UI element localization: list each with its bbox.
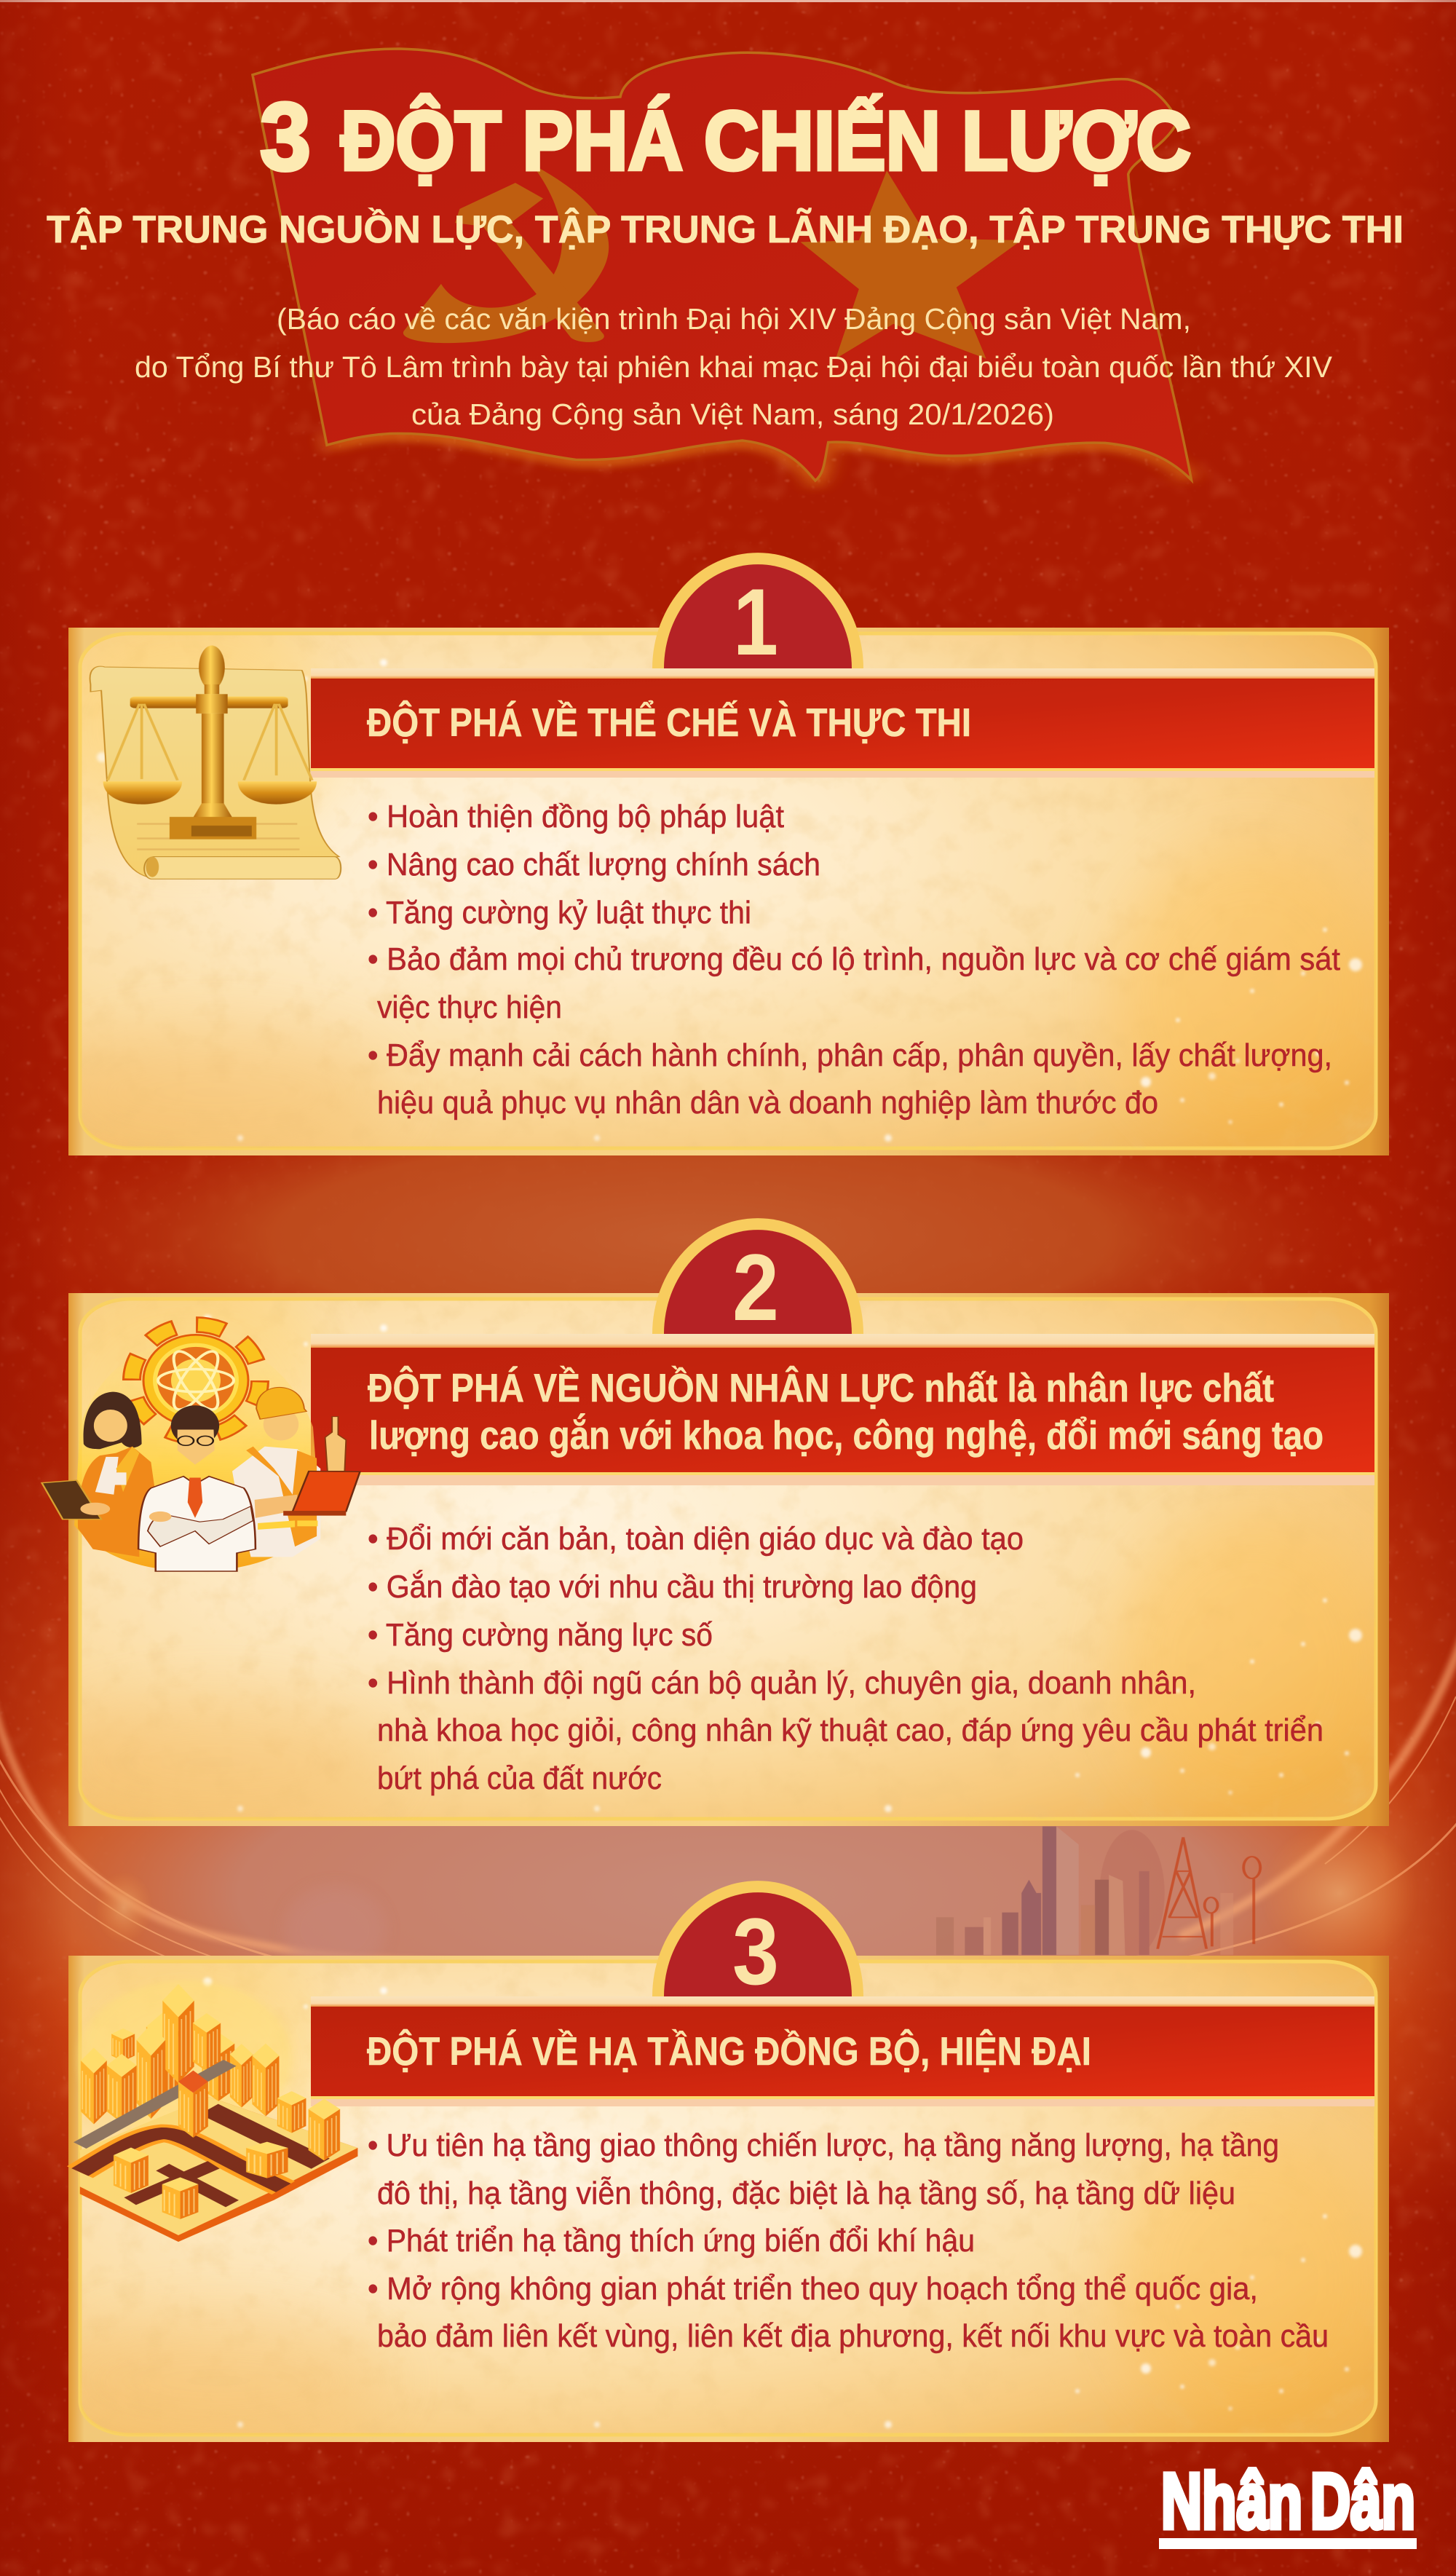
bullet list: • Tăng cường kỷ luật thực thi	[368, 895, 751, 931]
skyline silhouette	[936, 1826, 1260, 1956]
bullet list: • Bảo đảm mọi chủ trương đều có lộ trình, nguồn lực và cơ chế giám sát	[368, 941, 1340, 977]
intro text: do Tổng Bí thư Tô Lâm trình bày tại phiên khai mạc Đại hội đại biểu toàn quốc lần thứ XIV	[135, 350, 1333, 384]
buildings	[111, 2028, 135, 2061]
bullet list: bứt phá của đất nước	[377, 1761, 662, 1796]
bullet list: • Mở rộng không gian phát triển theo quy hoạch tổng thể quốc gia,	[368, 2271, 1258, 2307]
panel 1	[44, 553, 1390, 1158]
bullet list: • Đổi mới căn bản, toàn diện giáo dục và đào tạo	[368, 1521, 1024, 1557]
panel 2	[41, 1218, 1390, 1828]
title: ĐỘT PHÁ CHIẾN LƯỢC	[341, 95, 1191, 188]
header band	[311, 1334, 1374, 1485]
icon: hammer and sickle	[403, 164, 609, 343]
bullet list: hiệu quả phục vụ nhân dân và doanh nghiệp làm thước đo	[377, 1085, 1158, 1121]
logo: Dân	[1310, 2457, 1415, 2545]
city base	[80, 2097, 357, 2242]
light swooshes	[0, 1616, 1456, 1973]
bullet list	[368, 1521, 1324, 1796]
title: 3	[260, 83, 311, 190]
bullet list: đô thị, hạ tầng viễn thông, đặc biệt là hạ tầng số, hạ tầng dữ liệu	[377, 2176, 1235, 2211]
bullet list: • Hoàn thiện đồng bộ pháp luật	[368, 799, 784, 834]
bullet list: • Phát triển hạ tầng thích ứng biến đổi khí hậu	[368, 2223, 975, 2259]
bullet list: • Đẩy mạnh cải cách hành chính, phân cấp, phân quyền, lấy chất lượng,	[368, 1038, 1332, 1073]
bullet list	[368, 2127, 1329, 2354]
intro text: của Đảng Cộng sản Việt Nam, sáng 20/1/2026)	[411, 398, 1054, 431]
flag shape	[253, 49, 1191, 481]
scientist	[138, 1477, 256, 1571]
glow disc	[74, 1340, 320, 1571]
panel 3	[44, 1881, 1390, 2446]
number badge 1: 1	[733, 569, 778, 675]
bullet list: nhà khoa học giỏi, công nhân kỹ thuật cao, đáp ứng yêu cầu phát triển	[377, 1712, 1324, 1748]
number badge 2: 2	[732, 1234, 779, 1340]
bullet list: • Nâng cao chất lượng chính sách	[368, 847, 820, 882]
icon: scales on scroll	[90, 646, 341, 879]
header band	[311, 1996, 1374, 2106]
intro text: (Báo cáo về các văn kiện trình Đại hội XIV Đảng Cộng sản Việt Nam,	[277, 302, 1191, 336]
bullet list: bảo đảm liên kết vùng, liên kết địa phương, kết nối khu vực và toàn cầu	[377, 2318, 1329, 2354]
bullet list	[368, 799, 1340, 1121]
header band: lượng cao gắn với khoa học, công nghệ, đổi mới sáng tạo	[369, 1413, 1324, 1458]
bullet list: • Hình thành đội ngũ cán bộ quản lý, chuyên gia, doanh nhân,	[368, 1665, 1196, 1701]
woman	[84, 1392, 142, 1449]
icon: isometric city	[79, 1980, 357, 2242]
icon: gear	[132, 1324, 260, 1437]
icon: three professionals with gear	[41, 1324, 360, 1571]
roads	[80, 2109, 320, 2204]
bullet list: • Gắn đào tạo với nhu cầu thị trường lao động	[368, 1569, 977, 1605]
logo: Nhân	[1161, 2457, 1302, 2545]
intro text	[135, 302, 1333, 431]
number badge 2	[652, 1218, 863, 1340]
engineer	[232, 1447, 320, 1557]
header band: ĐỘT PHÁ VỀ HẠ TẦNG ĐỒNG BỘ, HIỆN ĐẠI	[367, 2028, 1091, 2074]
number badge 3	[652, 1881, 863, 2004]
bullet list: việc thực hiện	[377, 989, 562, 1025]
bullet list: • Tăng cường năng lực số	[368, 1617, 713, 1653]
number badge 3: 3	[732, 1898, 779, 2004]
header band: ĐỘT PHÁ VỀ THỂ CHẾ VÀ THỰC THI	[367, 700, 971, 745]
flag	[253, 49, 1191, 481]
subtitle: TẬP TRUNG NGUỒN LỰC, TẬP TRUNG LÃNH ĐẠO, TẬP TRUNG THỰC THI	[47, 207, 1404, 251]
bullet list: • Ưu tiên hạ tầng giao thông chiến lược, hạ tầng năng lượng, hạ tầng	[368, 2127, 1279, 2163]
header band: ĐỘT PHÁ VỀ NGUỒN NHÂN LỰC nhất là nhân lực chất	[368, 1365, 1274, 1410]
laptop	[293, 1471, 360, 1512]
header band	[311, 668, 1374, 778]
number badge 1	[652, 553, 863, 675]
icon: star	[800, 170, 1021, 359]
